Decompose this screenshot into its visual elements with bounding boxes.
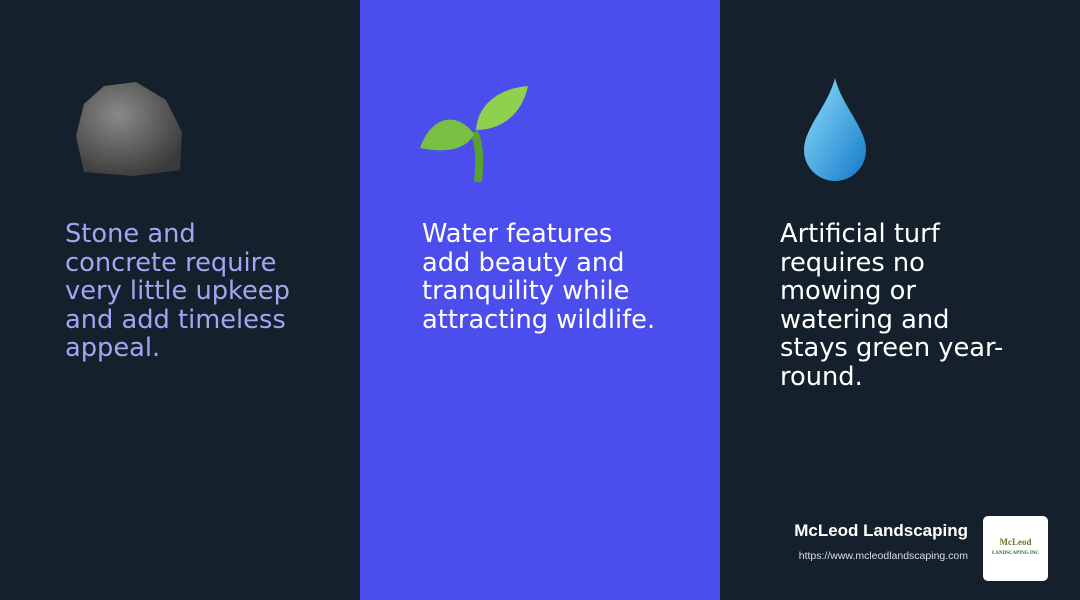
icon: sprout — [420, 86, 528, 182]
footer: brand — [794, 516, 1048, 581]
text: water features: Water features add beauty and tranquility while attracting wildlife. — [422, 219, 655, 334]
logo: McLeod — [1000, 537, 1032, 547]
logo: LANDSCAPING INC — [992, 551, 1039, 556]
brand url: https://www.mcleodlandscaping.com — [799, 550, 968, 562]
panel: water features — [360, 0, 720, 600]
text: artificial turf: Artificial turf requires no mowing or watering and stays green year-round. — [780, 219, 1003, 392]
icon: rock — [76, 82, 182, 176]
panel: stone — [0, 0, 360, 600]
panel: artificial turf — [720, 0, 1080, 600]
brand name: McLeod Landscaping — [794, 521, 968, 540]
icon: water drop — [804, 78, 866, 181]
logo — [983, 516, 1048, 581]
text: stone: Stone and concrete require very little upkeep and add timeless appeal. — [65, 219, 290, 363]
